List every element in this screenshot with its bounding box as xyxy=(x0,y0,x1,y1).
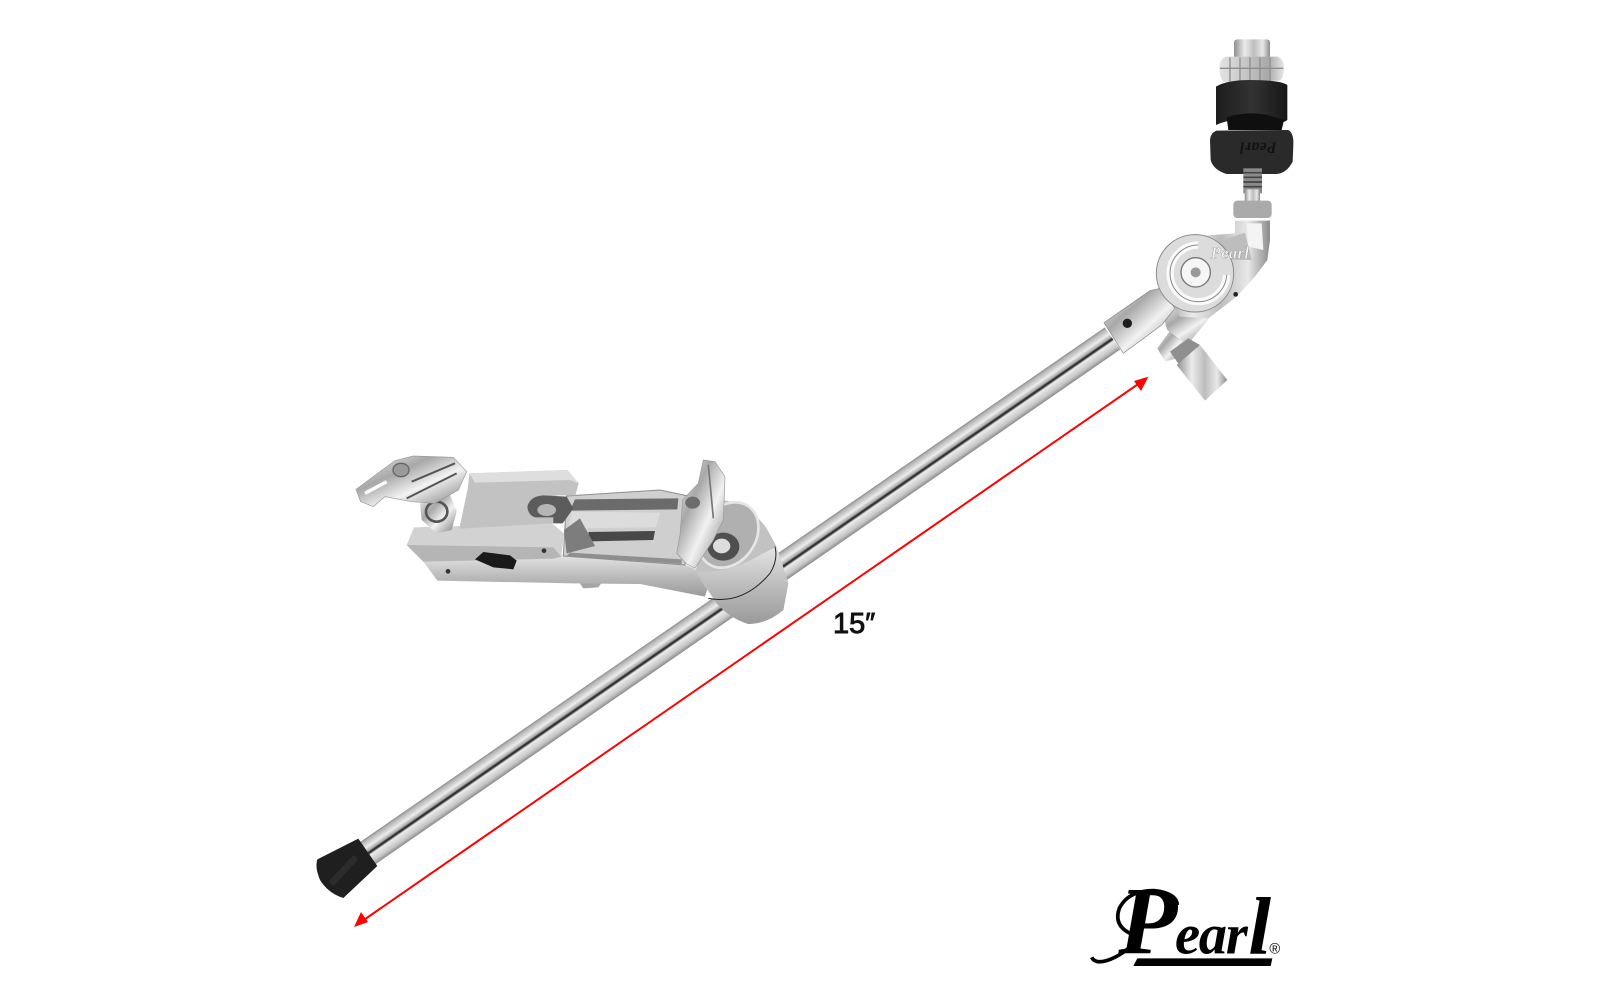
dimension label: 15 xyxy=(833,608,865,640)
washer xyxy=(1233,201,1272,218)
Pearl logo xyxy=(1092,867,1280,974)
lower body lobe xyxy=(1160,307,1213,342)
registered mark: ® xyxy=(1269,941,1280,957)
rail channel xyxy=(563,490,688,565)
black wing base xyxy=(1210,130,1293,174)
upper plate xyxy=(459,470,579,529)
round pivot disc xyxy=(1156,235,1234,312)
T-bolt knob xyxy=(1157,332,1227,401)
wordmark: l xyxy=(1248,880,1271,971)
rubber end cap xyxy=(316,839,377,898)
underline bar xyxy=(1133,958,1272,966)
boom head assembly xyxy=(1104,39,1293,401)
wordmark: ear xyxy=(1175,904,1249,966)
slider block xyxy=(407,523,564,574)
bracket logo mark: Pearl xyxy=(1210,244,1249,263)
left wing nut bolt xyxy=(420,495,457,533)
flourish xyxy=(1092,891,1177,962)
clamp lower body xyxy=(423,555,710,597)
knurled silver nut xyxy=(1219,57,1284,82)
black felt holder xyxy=(1216,80,1287,130)
threaded tip xyxy=(1234,39,1270,59)
dimension label: ″ xyxy=(865,607,875,638)
under-side knob xyxy=(579,583,602,588)
clamp assembly xyxy=(356,456,788,624)
dimension arrow xyxy=(354,377,1148,927)
collar cylinder xyxy=(686,491,788,624)
elbow and body xyxy=(1160,221,1270,318)
wordmark: P xyxy=(1117,867,1178,974)
inverted logo mark: Pearl xyxy=(1239,139,1277,156)
rod socket xyxy=(1104,288,1175,353)
right wing nut xyxy=(677,460,725,568)
threaded stem xyxy=(1243,168,1262,201)
left wing nut xyxy=(356,456,467,507)
boom rod xyxy=(360,327,1120,864)
